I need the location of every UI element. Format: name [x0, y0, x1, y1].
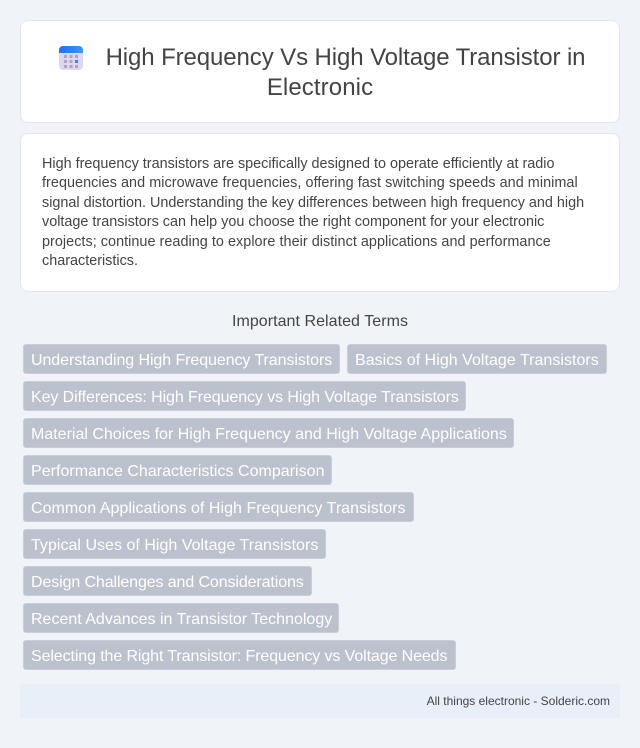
title	[106, 44, 585, 101]
text block: introduction: frequencies and microwave frequencies, offering fast switching speeds and minimal	[42, 175, 578, 191]
tag: Key Differences: High Frequency vs High Voltage Transistors	[31, 389, 459, 406]
tag: Common Applications of High Frequency Transistors	[31, 500, 406, 517]
heading: related terms: Important Related Terms	[232, 313, 408, 330]
icon: calendar	[59, 46, 83, 70]
tag	[23, 566, 312, 596]
text block: introduction: High frequency transistors are specifically designed to operate efficiently at radio	[42, 156, 554, 172]
tag: Selecting the Right Transistor: Frequency vs Voltage Needs	[31, 648, 447, 665]
text block: introduction	[42, 156, 584, 269]
tag	[23, 529, 326, 559]
tag	[23, 344, 340, 374]
tag: Basics of High Voltage Transistors	[355, 352, 599, 369]
tag: Material Choices for High Frequency and High Voltage Applications	[31, 426, 507, 443]
tag	[347, 344, 607, 374]
text block: introduction: projects; continue reading to explore their distinct applications and performance	[42, 234, 551, 250]
panel: title card	[20, 20, 620, 123]
title: Electronic	[267, 74, 373, 101]
tag list: related terms	[23, 344, 607, 670]
tag: Recent Advances in Transistor Technology	[31, 611, 332, 628]
tag	[23, 492, 414, 522]
footer: All things electronic - Solderic.com	[427, 694, 610, 708]
title: High Frequency Vs High Voltage Transistor in	[106, 44, 585, 71]
panel: introduction	[20, 133, 620, 292]
tag: Performance Characteristics Comparison	[31, 463, 324, 480]
tag	[23, 381, 466, 411]
tag: Understanding High Frequency Transistors	[31, 352, 332, 369]
tag	[23, 455, 332, 485]
text block: introduction: voltage transistors can help you choose the right component for your electronic	[42, 214, 544, 230]
tag	[23, 418, 514, 448]
tag	[23, 640, 456, 670]
footer	[20, 684, 620, 718]
tag	[23, 603, 339, 633]
text block: introduction: signal distortion. Understanding the key differences between high frequency and high	[42, 195, 584, 211]
tag: Typical Uses of High Voltage Transistors	[31, 537, 318, 554]
text block: introduction: characteristics.	[42, 253, 138, 269]
tag: Design Challenges and Considerations	[31, 574, 304, 591]
